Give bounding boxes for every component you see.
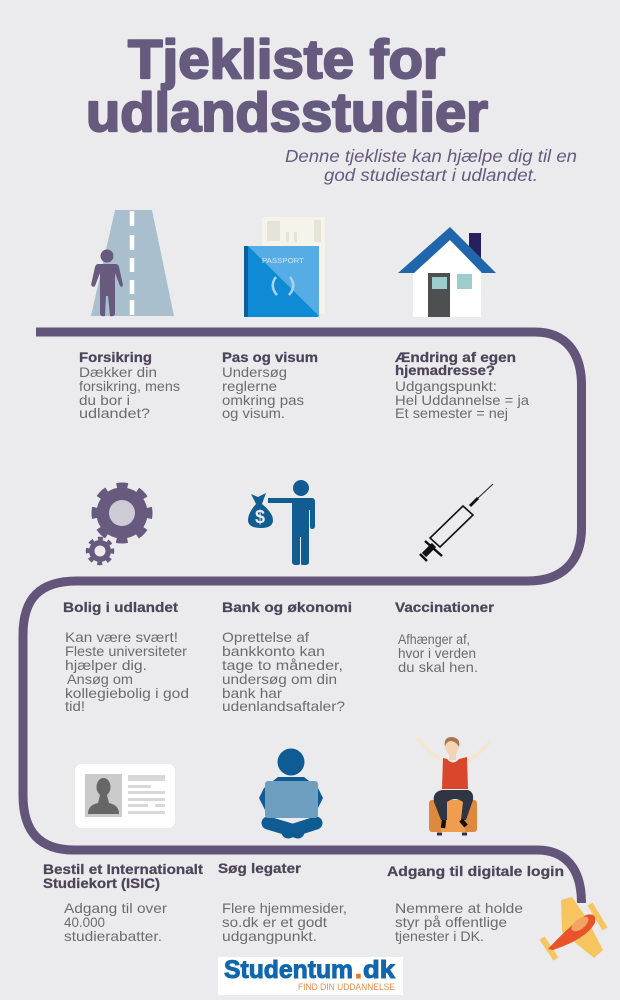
column text: Pas og visum xyxy=(222,349,318,421)
column text: Bank og økonomi: udenlandsaftaler? xyxy=(222,698,345,714)
column text: Bank og økonomi: Bank og økonomi xyxy=(222,599,352,615)
winding route line xyxy=(23,332,582,903)
column text: Ændring af egen hjemadresse: Hel Uddannelse = ja xyxy=(395,392,529,408)
column text: Bank og økonomi: tage to måneder, xyxy=(222,657,343,673)
icon: airplane xyxy=(542,897,605,959)
column text: Adgang til digitale login xyxy=(387,863,564,944)
column text: Vaccinationer: hvor i verden xyxy=(398,645,476,661)
column text: Studiekort: studierabatter. xyxy=(64,928,162,944)
column text: Forsikring xyxy=(79,349,180,421)
column text: Ændring af egen hjemadresse: Et semester = nej xyxy=(395,405,508,421)
icon: road with person xyxy=(91,210,174,316)
column text: Bank og økonomi xyxy=(222,599,352,714)
logo: Studentum.dk: . xyxy=(355,956,362,984)
subtitle xyxy=(285,146,577,185)
column text: Studiekort: Studiekort (ISIC) xyxy=(43,875,160,891)
column text: Bank og økonomi: bank har xyxy=(222,685,282,701)
logo: Studentum.dk xyxy=(218,956,403,995)
column text: Bolig i udlandet: Ansøg om xyxy=(67,671,133,687)
column text: Bolig i udlandet: kollegiebolig i god xyxy=(65,685,189,701)
subtitle: Denne tjekliste kan hjælpe dig til en xyxy=(285,146,577,166)
column text: Pas og visum: reglerne xyxy=(222,378,277,394)
logo: Studentum.dk: dk xyxy=(363,956,395,984)
column text: Vaccinationer: Vaccinationer xyxy=(395,599,495,615)
column text: Studiekort xyxy=(43,861,203,944)
column text: Søg legater: udgangpunkt. xyxy=(222,928,317,944)
column text: Bolig i udlandet: tid! xyxy=(65,698,85,714)
column text: Forsikring: udlandet? xyxy=(79,405,150,421)
column text: Pas og visum: Pas og visum xyxy=(222,349,318,365)
column text: Søg legater: so.dk er et godt xyxy=(222,914,327,930)
column text: Studiekort: 40.000 xyxy=(64,914,105,930)
icon: person with money bag xyxy=(248,480,315,565)
column text: Ændring af egen hjemadresse: Udgangspunkt: xyxy=(395,378,497,394)
title: udlandsstudier xyxy=(86,81,488,143)
column text: Søg legater: Søg legater xyxy=(218,860,302,876)
column text: Søg legater: Flere hjemmesider, xyxy=(222,900,347,916)
icon: passport xyxy=(244,217,325,317)
column text: Adgang til digitale login: styr på offentlige xyxy=(395,914,507,930)
column text: Bank og økonomi: bankkonto kan xyxy=(222,643,325,659)
icon: student ID card xyxy=(75,764,175,828)
column text: Bolig i udlandet: Fleste universiteter xyxy=(65,643,187,659)
logo: Studentum.dk: FIND DIN UDDANNELSE xyxy=(298,982,395,993)
icon: house xyxy=(398,227,496,317)
logo: Studentum.dk: Studentum xyxy=(224,956,353,984)
column text: Adgang til digitale login: tjenester i DK. xyxy=(395,928,484,944)
column text: Bolig i udlandet: hjælper dig. xyxy=(65,657,147,673)
column text: Pas og visum: omkring pas xyxy=(222,392,304,408)
column text: Vaccinationer: du skal hen. xyxy=(398,659,478,675)
column text: Vaccinationer: Afhænger af, xyxy=(398,631,470,647)
subtitle: god studiestart i udlandet. xyxy=(324,165,538,185)
column text: Bank og økonomi: undersøg om din xyxy=(222,671,337,687)
column text: Ændring af egen hjemadresse: hjemadresse? xyxy=(395,362,495,378)
column text: Ændring af egen hjemadresse: Ændring af egen xyxy=(395,349,516,365)
icon: gears xyxy=(85,481,154,566)
column text: Forsikring: Dækker din xyxy=(79,364,157,380)
column text: Forsikring: Forsikring xyxy=(79,349,152,365)
column text: Bank og økonomi: Oprettelse af xyxy=(222,629,309,645)
column text: Bolig i udlandet xyxy=(63,599,189,714)
column text: Pas og visum: og visum. xyxy=(222,405,285,421)
column text: Bolig i udlandet: Kan være svært! xyxy=(65,629,178,645)
icon: passport: PASSPORT xyxy=(262,258,305,265)
column text: Adgang til digitale login: Nemmere at holde xyxy=(395,900,523,916)
column text: Vaccinationer xyxy=(395,599,495,675)
column text: Forsikring: du bor i xyxy=(79,392,130,408)
icon: person sitting on suitcase xyxy=(417,737,490,834)
icon: syringe xyxy=(420,484,493,561)
title xyxy=(86,28,488,143)
column text: Ændring af egen hjemadresse xyxy=(395,349,529,421)
icon: person with money bag: $ xyxy=(255,507,265,527)
column text: Forsikring: forsikring, mens xyxy=(79,378,180,394)
column text: Adgang til digitale login: Adgang til digitale login xyxy=(387,863,564,879)
column text: Bolig i udlandet: Bolig i udlandet xyxy=(63,599,178,615)
column text: Studiekort: Adgang til over xyxy=(64,900,167,916)
title: Tjekliste for xyxy=(128,28,445,90)
column text: Søg legater xyxy=(218,860,347,944)
column text: Pas og visum: Undersøg xyxy=(222,364,287,380)
column text: Studiekort: Bestil et Internationalt xyxy=(43,861,203,877)
icon: person with laptop xyxy=(259,748,323,832)
